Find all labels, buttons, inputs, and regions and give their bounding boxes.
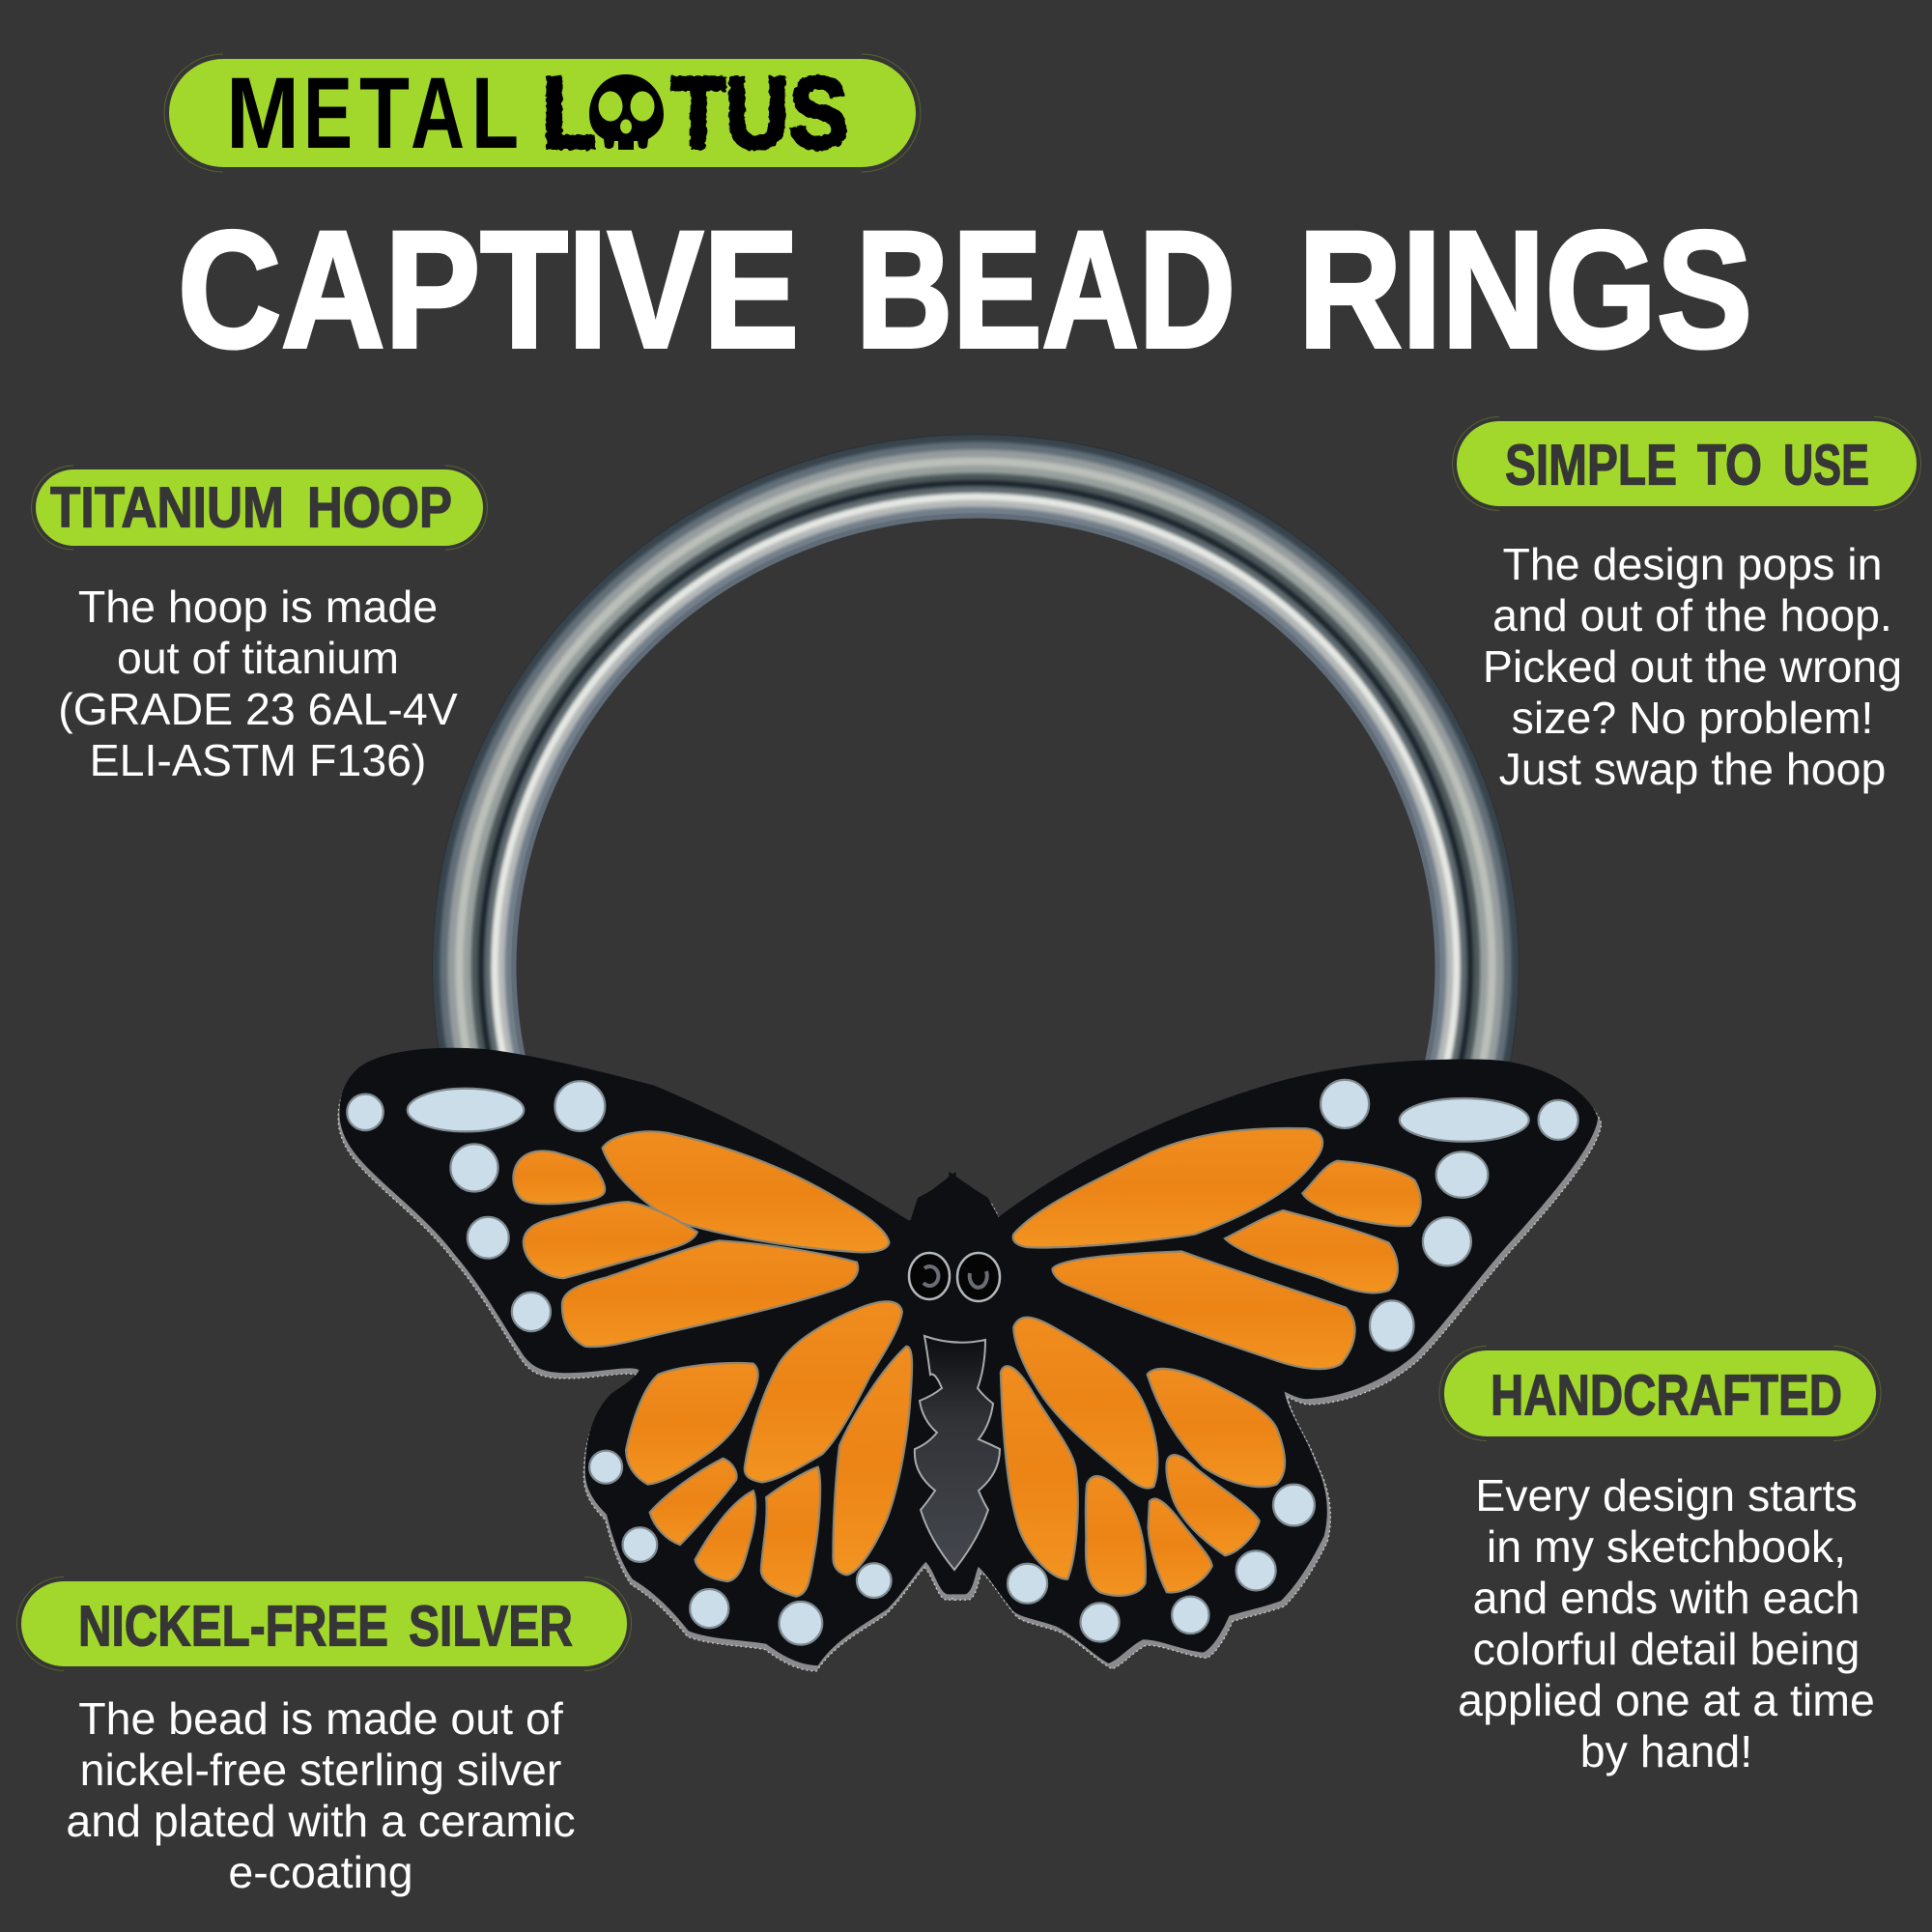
title: RINGS (1298, 197, 1752, 383)
callout: nickel-free silver: and plated with a ceramic (66, 1796, 576, 1846)
logo badge: Metal Lotus: TUS (671, 57, 848, 170)
callout: nickel-free silver (16, 1577, 631, 1897)
callout: simple to use: Just swap the hoop (1499, 744, 1886, 794)
callout: titanium hoop: out of titanium (117, 633, 399, 683)
callout: titanium hoop: HOOP (307, 475, 452, 539)
icon: skull replacing the O (589, 74, 664, 150)
callout: nickel-free silver: nickel-free sterling silver (80, 1745, 561, 1795)
callout: simple to use: size? No problem! (1512, 693, 1873, 743)
title: CAPTIVE (178, 197, 799, 383)
body and head (909, 1174, 1000, 1570)
logo badge: Metal Lotus (164, 54, 921, 172)
butterfly pendant (338, 1048, 1602, 1671)
callout: titanium hoop: (GRADE 23 6AL-4V (58, 684, 458, 734)
eye left (909, 1253, 950, 1299)
title (178, 197, 1752, 383)
titanium hoop ring (432, 434, 1520, 1063)
right wing (949, 1059, 1602, 1669)
callout: simple to use: The design pops in (1503, 539, 1882, 589)
callout: titanium hoop: ELI-ASTM F136) (90, 735, 426, 785)
title: BEAD (856, 197, 1236, 383)
callout: simple to use: USE (1783, 433, 1869, 497)
callout: simple to use: and out of the hoop. (1492, 590, 1892, 640)
callout: handcrafted: by hand! (1580, 1726, 1752, 1776)
callout: nickel-free silver: NICKEL-FREE (78, 1594, 388, 1658)
callout: handcrafted: in my sketchbook, (1487, 1521, 1846, 1572)
logo badge: Metal Lotus: A (411, 57, 465, 170)
abdomen (915, 1336, 1000, 1570)
logo badge: Metal Lotus: O (599, 71, 653, 156)
left wing (338, 1048, 956, 1671)
callout: handcrafted: colorful detail being (1473, 1624, 1860, 1674)
callout: simple to use (1452, 416, 1920, 794)
callout: titanium hoop: The hoop is made (78, 582, 438, 632)
callout: handcrafted: Every design starts (1475, 1470, 1858, 1520)
logo badge: Metal Lotus: T (359, 57, 410, 170)
logo badge: Metal Lotus: L (471, 57, 519, 170)
callout: simple to use: TO (1697, 433, 1762, 497)
callout: nickel-free silver: SILVER (409, 1594, 573, 1658)
callout: nickel-free silver: The bead is made out of (78, 1693, 563, 1744)
eye right (957, 1253, 1000, 1301)
callout: handcrafted: HANDCRAFTED (1491, 1364, 1842, 1428)
callout: handcrafted (1439, 1347, 1881, 1776)
callout: nickel-free silver: e-coating (228, 1847, 413, 1897)
callout: simple to use: Picked out the wrong (1483, 641, 1902, 692)
callout: simple to use: SIMPLE (1505, 433, 1677, 497)
callout: titanium hoop: TITANIUM (50, 475, 284, 539)
logo badge: Metal Lotus: E (303, 57, 353, 170)
callout: titanium hoop (31, 466, 487, 785)
callout: handcrafted: applied one at a time (1458, 1675, 1875, 1725)
logo badge: Metal Lotus: L (542, 57, 596, 170)
callout: handcrafted: and ends with each (1473, 1573, 1860, 1623)
logo badge: Metal Lotus: M (226, 57, 299, 170)
